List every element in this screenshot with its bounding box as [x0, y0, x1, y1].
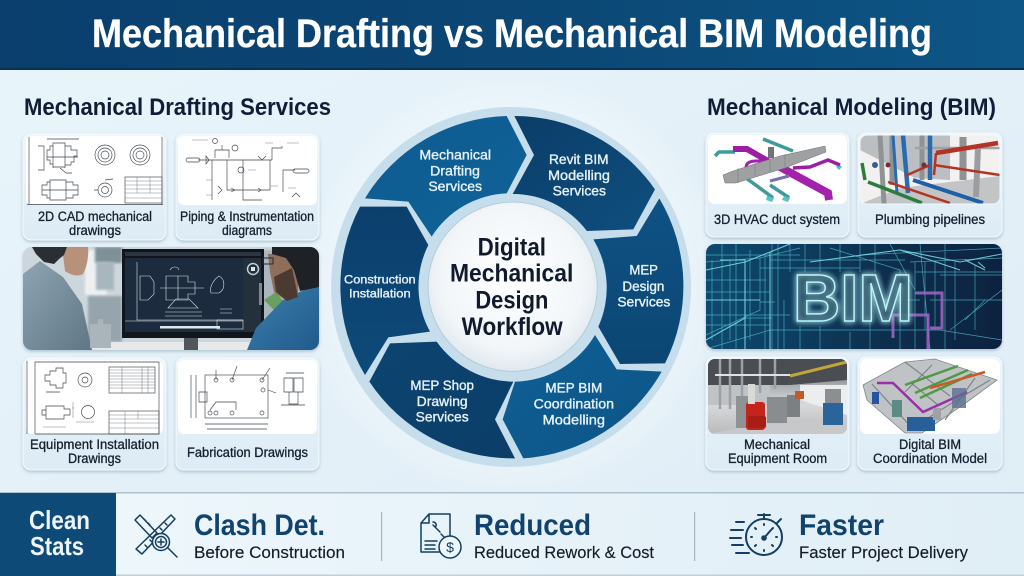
- card: piping and instrumentation diagrams: [176, 134, 319, 240]
- label: Mechanical: [744, 437, 810, 452]
- segment: MEP BIM coordination modelling: MEP BIM: [545, 380, 602, 396]
- stat: clash detection: [135, 509, 345, 562]
- segment: MEP design services: Design: [622, 278, 664, 294]
- green pipe: [862, 163, 922, 203]
- CAD drawing on monitor: [125, 262, 243, 329]
- card: 2D CAD mechanical drawings: [23, 134, 166, 240]
- glass flask on desk: [90, 319, 111, 348]
- segment: MEP shop drawing services: MEP Shop: [410, 377, 474, 393]
- segment: MEP design services: [593, 198, 683, 364]
- hub: digital mechanical design workflow: Workflow: [462, 314, 563, 341]
- segment: revit BIM modelling services: [513, 116, 655, 231]
- segment: MEP BIM coordination modelling: Modelling: [543, 411, 605, 427]
- stats strip: [0, 492, 1024, 576]
- hub: digital mechanical design workflow: Mechanical: [450, 261, 573, 288]
- card: 3D HVAC duct system: [706, 133, 849, 237]
- icon: crossed rulers with magnifier: [135, 515, 177, 557]
- segment: construction installation: Installation: [349, 286, 411, 300]
- card: equipment installation drawings: [23, 358, 166, 470]
- label: 3D HVAC duct system: [714, 212, 840, 227]
- label: Plumbing pipelines: [875, 212, 985, 227]
- card: equipment installation drawings: Drawings: [68, 451, 121, 466]
- process wheel: [331, 107, 691, 467]
- hub: digital mechanical design workflow: [420, 194, 605, 379]
- magenta ducts: [733, 149, 768, 161]
- segment: mechanical drafting services: Drafting: [430, 162, 480, 178]
- card: mechanical equipment room: [706, 357, 849, 470]
- segment: MEP BIM coordination modelling: Coordination: [534, 395, 614, 411]
- segment: MEP shop drawing services: [369, 342, 515, 458]
- stat: clash detection: Before Construction: [194, 543, 345, 562]
- right engineer: [264, 292, 284, 310]
- stat: reduced: Reduced Rework & Cost: [474, 543, 654, 562]
- stat label: clean stats: Clean: [29, 505, 90, 535]
- teal ducts: [715, 139, 793, 200]
- photo: engineers reviewing CAD drawing on monitor: [23, 247, 319, 350]
- segment: mechanical drafting services: [365, 116, 527, 237]
- colored services: [905, 366, 972, 398]
- stat: faster: [730, 509, 968, 562]
- segment: MEP design services: MEP: [629, 262, 658, 278]
- red pipes: [888, 153, 1000, 203]
- blue pipes: [893, 135, 897, 193]
- label: 2D CAD mechanical: [38, 209, 152, 224]
- heading: drafting: Mechanical Drafting Services: [24, 94, 331, 121]
- segment: revit BIM modelling services: Modelling: [548, 167, 610, 183]
- icon: stopwatch with speed lines: [730, 514, 782, 555]
- card: digital BIM coordination model: Coordination Model: [873, 451, 987, 466]
- heading: modeling: Mechanical Modeling (BIM): [707, 94, 996, 121]
- left engineer: [23, 261, 92, 350]
- segment: MEP shop drawing services: Drawing: [417, 393, 468, 409]
- label: Piping & Instrumentation: [180, 209, 314, 224]
- image: glowing BIM wireframe: [705, 244, 1002, 349]
- gray main duct: [723, 146, 826, 183]
- building shell: [863, 359, 997, 433]
- segment: MEP BIM coordination modelling: [503, 335, 662, 458]
- segment: revit BIM modelling services: Revit BIM: [549, 151, 609, 167]
- icon: document with dollar: [421, 514, 461, 558]
- segment: construction installation: [340, 207, 430, 375]
- segment: construction installation: Construction: [344, 273, 416, 287]
- BIM glowing text: BIM: [793, 261, 913, 336]
- stat: reduced: [421, 509, 654, 562]
- hub: digital mechanical design workflow: Digital: [478, 234, 546, 261]
- segment: mechanical drafting services: Mechanical: [419, 146, 491, 162]
- stat: clash detection: Clash Det.: [194, 509, 325, 542]
- stat label: clean stats: [0, 493, 116, 576]
- stat label: clean stats: Stats: [30, 531, 84, 561]
- panel: mechanical modeling BIM: [705, 94, 1002, 470]
- card: mechanical equipment room: Equipment Room: [728, 451, 827, 466]
- title: Mechanical Drafting vs Mechanical BIM Modeling: [92, 12, 932, 56]
- stat: faster: Faster Project Delivery: [799, 543, 968, 562]
- purple ducts: [893, 293, 942, 349]
- icon: document with dollar: $: [446, 539, 454, 555]
- card: digital BIM coordination model: [858, 357, 1002, 470]
- label: Digital BIM: [899, 437, 961, 452]
- stat: reduced: Reduced: [474, 509, 591, 542]
- card: plumbing pipelines: [858, 133, 1002, 237]
- segment: revit BIM modelling services: Services: [553, 183, 606, 199]
- label: Fabrication Drawings: [187, 445, 308, 460]
- card: fabrication drawings: [176, 358, 319, 470]
- card: 2D CAD mechanical drawings: drawings: [69, 223, 121, 238]
- segment: mechanical drafting services: Services: [428, 178, 482, 194]
- monitor: [122, 249, 264, 338]
- stat: faster: Faster: [799, 509, 884, 542]
- background halo around wheel: [297, 72, 727, 502]
- segment: MEP shop drawing services: Services: [416, 408, 469, 424]
- header banner: [0, 0, 1024, 70]
- hub: digital mechanical design workflow: Design: [475, 287, 548, 314]
- panel: mechanical drafting services: [23, 94, 331, 470]
- label: Equipment Installation: [30, 437, 159, 452]
- card: piping and instrumentation diagrams: diagrams: [222, 223, 272, 238]
- segment: MEP design services: Services: [617, 294, 670, 310]
